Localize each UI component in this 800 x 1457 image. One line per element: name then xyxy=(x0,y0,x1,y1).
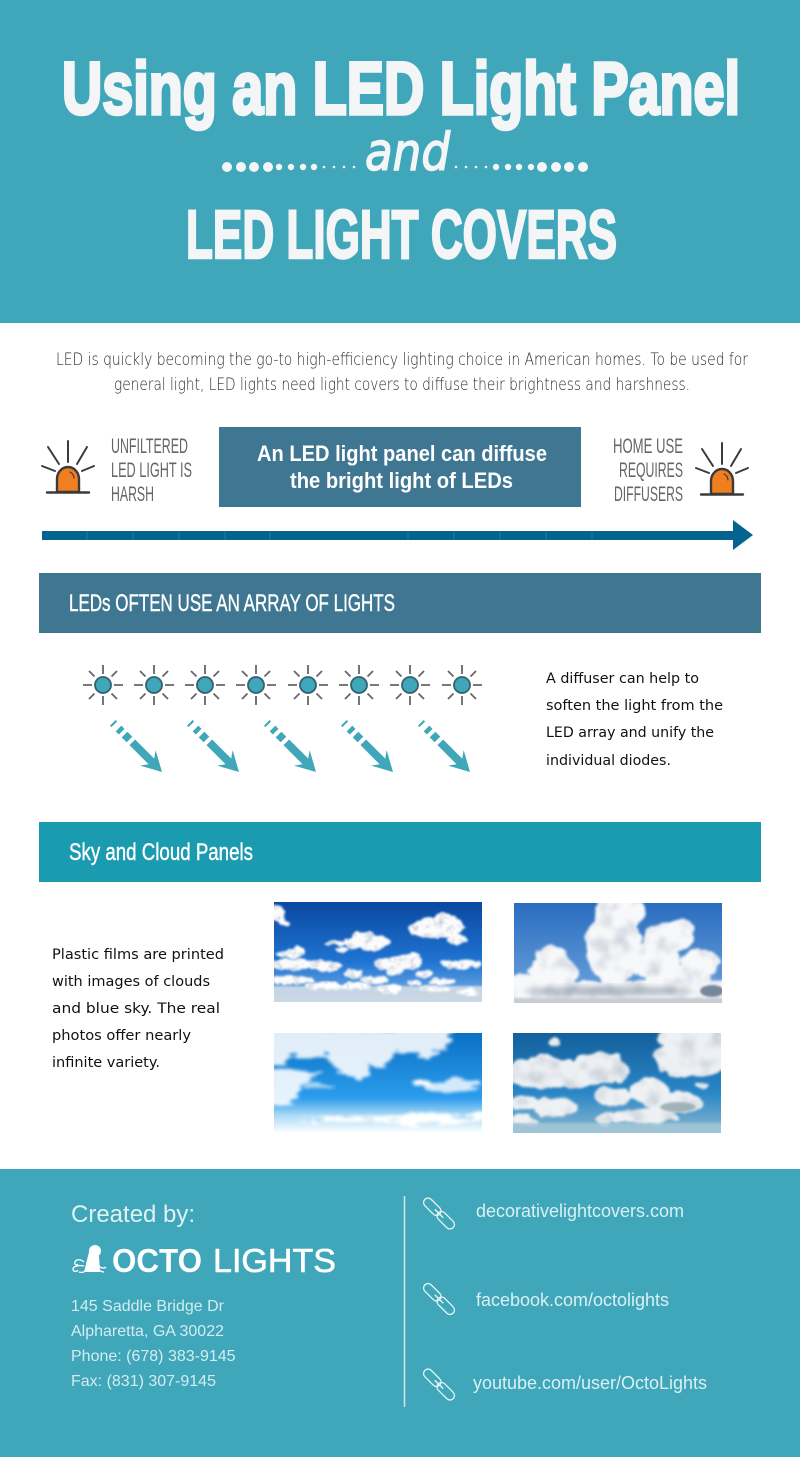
address: Fax: (831) 307-9145 xyxy=(71,1373,216,1390)
text: diffuser note: LED array and unify the xyxy=(546,725,714,741)
logo wordmark: OCTO xyxy=(112,1242,202,1279)
heading bar: sky and cloud: Sky and Cloud Panels xyxy=(69,839,253,866)
label: home use: REQUIRES xyxy=(619,459,683,482)
link: website: decorativelightcovers.com xyxy=(476,1201,684,1221)
text: plastic films: Plastic films are printed xyxy=(52,947,224,963)
text: plastic films: and blue sky. The real xyxy=(52,1001,220,1017)
icon: link 3 xyxy=(422,1367,456,1402)
icon: LED 3 xyxy=(185,665,225,705)
icon: LED 1 xyxy=(83,665,123,705)
icon: siren right xyxy=(696,443,748,494)
dotted ornament xyxy=(222,162,588,172)
text: diffuser note: A diffuser can help to xyxy=(546,671,699,687)
address: Alpharetta, GA 30022 xyxy=(71,1323,224,1340)
link: facebook: facebook.com/octolights xyxy=(476,1290,669,1310)
title script word: and: and xyxy=(365,123,451,183)
icon: link 2 xyxy=(422,1282,456,1316)
heading bar: array xyxy=(39,573,761,633)
icon: LED 8 xyxy=(442,665,482,705)
heading bar: array: LEDs OFTEN USE AN ARRAY OF LIGHTS xyxy=(69,590,395,617)
text: plastic films: photos offer nearly xyxy=(52,1028,191,1044)
icon: LED 6 xyxy=(339,665,379,705)
photo: cirrus wisps xyxy=(274,1033,482,1132)
text: diffuser note: individual diodes. xyxy=(546,753,671,769)
label: unfiltered: HARSH xyxy=(111,483,154,506)
arrow 2 xyxy=(182,715,247,780)
icon: LED 2 xyxy=(134,665,174,705)
text: plastic films: infinite variety. xyxy=(52,1055,160,1071)
intro text xyxy=(56,350,748,395)
arrow 3 xyxy=(259,715,324,780)
text: plastic films xyxy=(52,947,224,1071)
text: diffuser note: soften the light from the xyxy=(546,698,723,714)
icon: LED 4 xyxy=(236,665,276,705)
heading bar: sky and cloud xyxy=(39,822,761,882)
label: unfiltered: LED LIGHT IS xyxy=(111,459,192,482)
arrow 5 xyxy=(413,715,478,780)
arrow 1 xyxy=(105,715,170,780)
callout: LED light panel: the bright light of LEDs xyxy=(290,468,513,493)
label: unfiltered: UNFILTERED xyxy=(111,435,188,458)
header panel xyxy=(0,0,800,323)
callout: LED light panel: An LED light panel can diffuse xyxy=(257,441,547,466)
logo wordmark xyxy=(112,1242,336,1279)
link: youtube: youtube.com/user/OctoLights xyxy=(473,1373,707,1393)
arrows: diffused light xyxy=(105,715,478,780)
arrow: timeline xyxy=(42,520,753,550)
created by: Created by: xyxy=(71,1201,195,1228)
icon: siren left xyxy=(42,441,94,492)
icons: LED array xyxy=(83,665,482,705)
address: Phone: (678) 383-9145 xyxy=(71,1348,236,1365)
label: home use: DIFFUSERS xyxy=(614,483,683,506)
footer panel xyxy=(0,1169,800,1457)
address: 145 Saddle Bridge Dr xyxy=(71,1298,225,1315)
label: home use: HOME USE xyxy=(613,435,683,458)
icon: octopus logo xyxy=(73,1245,106,1272)
photo: billowing clouds xyxy=(513,1033,721,1133)
photo: scattered clouds xyxy=(274,902,482,1002)
icon: LED 5 xyxy=(288,665,328,705)
callout: LED light panel xyxy=(219,427,581,507)
address xyxy=(71,1298,236,1390)
photo: cumulus tower xyxy=(514,903,722,1003)
icon: LED 7 xyxy=(390,665,430,705)
label: home use xyxy=(613,435,683,506)
text: diffuser note xyxy=(546,671,723,769)
logo wordmark: LIGHTS xyxy=(213,1242,336,1279)
icon: link 1 xyxy=(422,1196,456,1231)
label: unfiltered xyxy=(111,435,192,506)
text: plastic films: with images of clouds xyxy=(52,974,210,990)
arrow 4 xyxy=(336,715,401,780)
